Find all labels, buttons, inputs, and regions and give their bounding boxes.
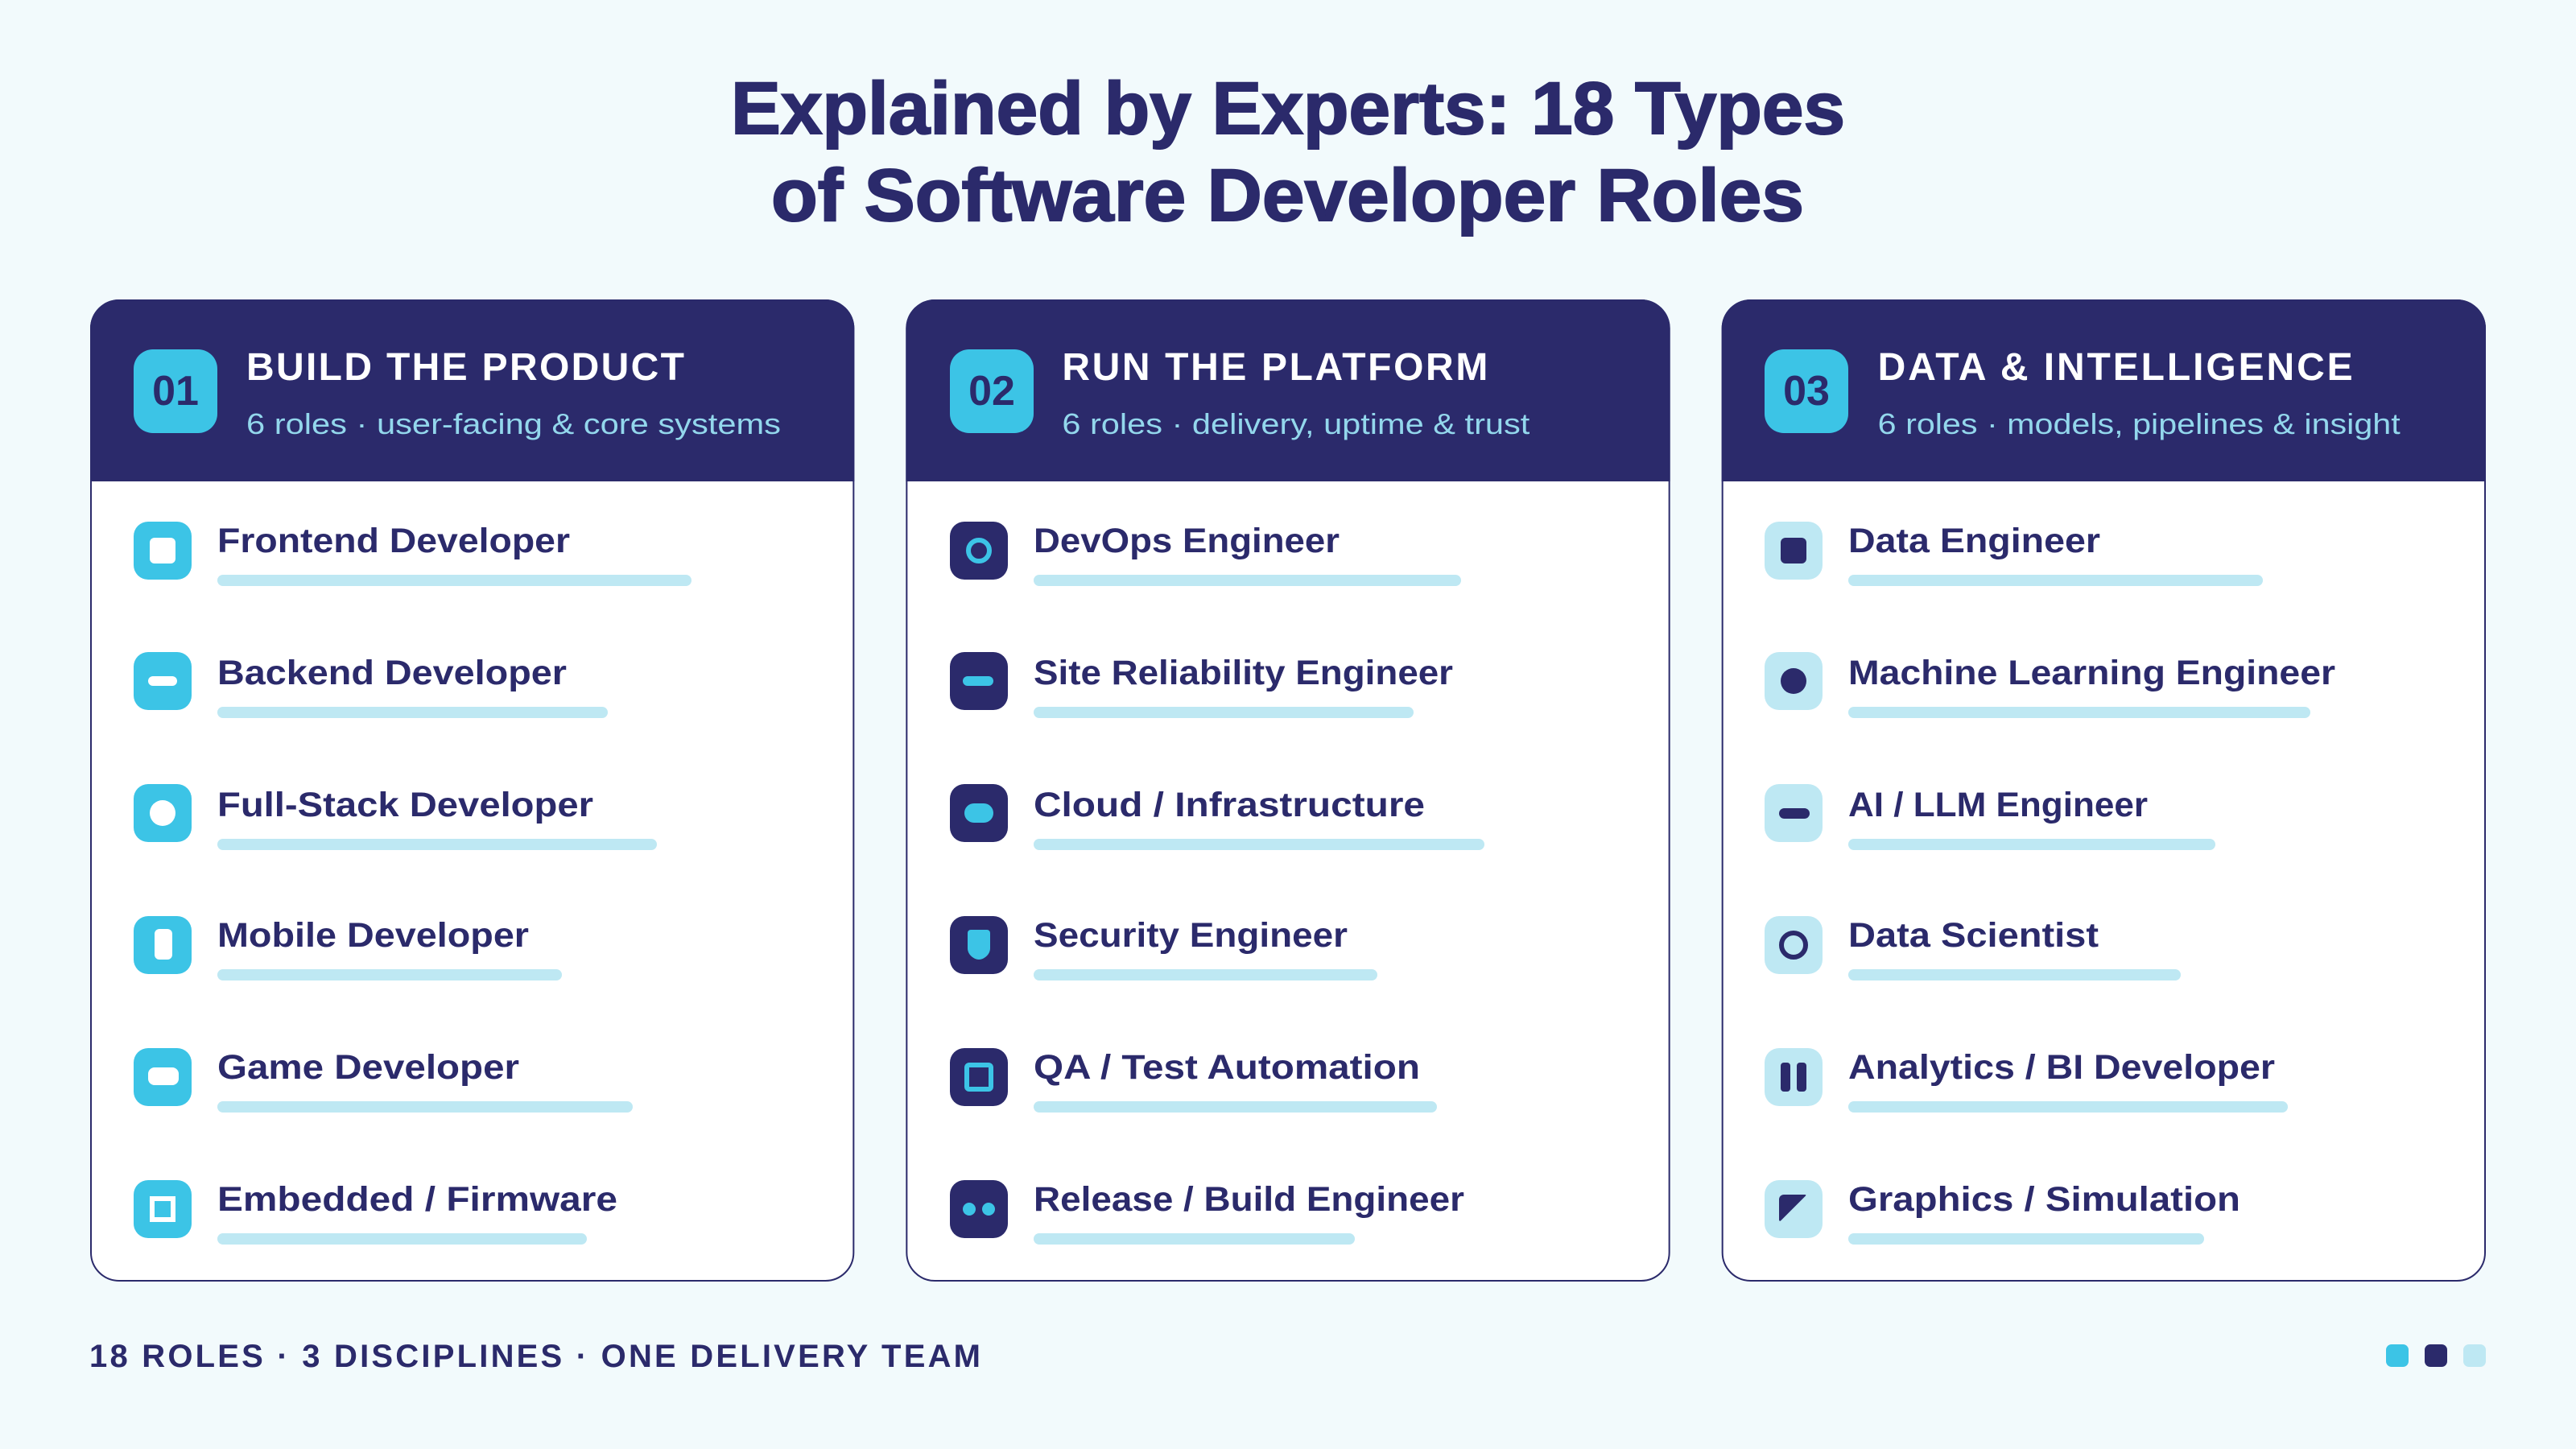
role: data engineer (1765, 522, 2263, 586)
panel heading: BUILD THE PRODUCT (246, 346, 684, 389)
role: devops engineer: DevOps Engineer (1034, 522, 1340, 560)
role: graphics / simulation: Graphics / Simulation (1848, 1180, 2240, 1219)
panel heading: RUN THE PLATFORM (1062, 346, 1488, 389)
role: ai / llm engineer: AI / LLM Engineer (1848, 786, 2148, 824)
role: machine learning engineer (1765, 652, 2335, 718)
number badge 02 (950, 349, 1034, 433)
panel: build the product (90, 299, 854, 1281)
title (731, 68, 1845, 237)
role: security engineer: Security Engineer (1034, 916, 1348, 955)
role: full-stack developer (134, 784, 657, 850)
panel subheading: 6 roles · user-facing & core systems (246, 407, 781, 440)
role: full-stack developer: Full-Stack Developer (217, 786, 593, 824)
panel header: data and intelligence (1722, 299, 2486, 481)
title: of Software Developer Roles (771, 155, 1804, 237)
role: frontend developer: Frontend Developer (217, 522, 570, 560)
role: graphics / simulation (1765, 1180, 2240, 1245)
role: game developer: Game Developer (217, 1048, 519, 1087)
role: cloud / infrastructure (950, 784, 1484, 850)
role: release / build engineer: Release / Build Engineer (1034, 1180, 1464, 1219)
role: site reliability engineer: Site Reliability Engineer (1034, 654, 1453, 692)
role: security engineer (950, 916, 1377, 980)
role: data engineer: Data Engineer (1848, 522, 2100, 560)
number badge 02: 02 (968, 368, 1015, 415)
footer colour dots (2386, 1344, 2486, 1367)
role: data scientist (1765, 916, 2181, 980)
panel heading: DATA & INTELLIGENCE (1878, 346, 2353, 389)
role: frontend developer (134, 522, 691, 586)
role: mobile developer (134, 916, 562, 980)
role: game developer (134, 1048, 633, 1113)
panel header: run the platform (906, 299, 1670, 481)
role: mobile developer: Mobile Developer (217, 916, 529, 955)
role: embedded / firmware: Embedded / Firmware (217, 1180, 617, 1219)
role: ai / llm engineer (1765, 784, 2215, 850)
title: Explained by Experts: 18 Types (731, 68, 1845, 150)
role: qa / test automation: QA / Test Automation (1034, 1048, 1420, 1087)
number badge 01: 01 (152, 368, 199, 415)
role: machine learning engineer: Machine Learning Engineer (1848, 654, 2335, 692)
role: data scientist: Data Scientist (1848, 916, 2099, 955)
role: release / build engineer (950, 1180, 1464, 1245)
panel: run the platform (906, 299, 1670, 1281)
role: backend developer: Backend Developer (217, 654, 567, 692)
number badge 01 (134, 349, 217, 433)
role: backend developer (134, 652, 608, 718)
role: qa / test automation (950, 1048, 1437, 1113)
role: cloud / infrastructure: Cloud / Infrastructure (1034, 786, 1425, 824)
role: devops engineer (950, 522, 1461, 586)
role: site reliability engineer (950, 652, 1453, 718)
role: analytics / bi developer: Analytics / BI Developer (1848, 1048, 2275, 1087)
role: analytics / bi developer (1765, 1048, 2288, 1113)
panel: data and intelligence (1722, 299, 2486, 1281)
number badge 03: 03 (1783, 368, 1830, 415)
panel subheading: 6 roles · models, pipelines & insight (1878, 407, 2401, 440)
panel subheading: 6 roles · delivery, uptime & trust (1062, 407, 1530, 440)
number badge 03 (1765, 349, 1848, 433)
role: embedded / firmware (134, 1180, 617, 1245)
panel header: build the product (90, 299, 854, 481)
footer caption: 18 ROLES · 3 DISCIPLINES · ONE DELIVERY TEAM (89, 1339, 980, 1374)
